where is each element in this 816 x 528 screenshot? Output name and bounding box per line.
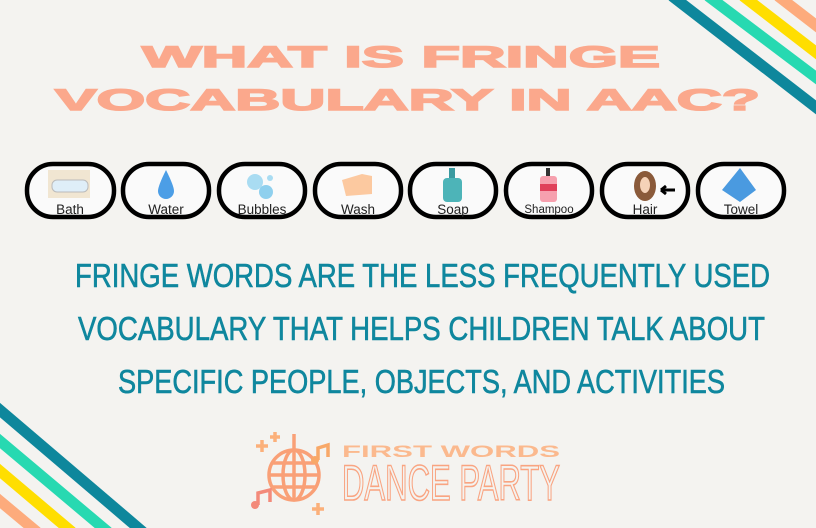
- card: Shampoo: [506, 164, 592, 217]
- card: Water: [123, 164, 209, 217]
- card: Towel: Towel: [724, 202, 758, 217]
- card: Towel: [698, 164, 784, 217]
- card: Bath: [27, 164, 114, 217]
- logo text: FIRST WORDS: FIRST WORDS: [342, 442, 560, 461]
- logo text: DANCE PARTY: DANCE PARTY: [342, 455, 560, 511]
- title: VOCABULARY IN AAC?: [55, 84, 760, 117]
- card: Wash: Wash: [341, 202, 375, 217]
- title: [55, 41, 760, 117]
- card: Bubbles: Bubbles: [238, 202, 287, 217]
- card: Soap: Soap: [437, 202, 469, 217]
- card: Bath: Bath: [56, 202, 84, 217]
- stripes: bottom left corner: [0, 405, 143, 528]
- title: WHAT IS FRINGE: [142, 41, 660, 74]
- card: Wash: [315, 164, 401, 217]
- icon: disco globe: [256, 432, 328, 515]
- card: Water: Water: [148, 202, 184, 217]
- stripes: top right corner: [672, 0, 816, 112]
- word cards row: [27, 164, 784, 217]
- card: Hair: [602, 164, 688, 217]
- logo: [251, 432, 560, 515]
- card: Soap: [410, 164, 496, 217]
- card: Shampoo: Shampoo: [524, 204, 574, 216]
- card: Hair: Hair: [633, 202, 658, 217]
- card: Bubbles: [219, 164, 305, 217]
- body text: [75, 257, 770, 400]
